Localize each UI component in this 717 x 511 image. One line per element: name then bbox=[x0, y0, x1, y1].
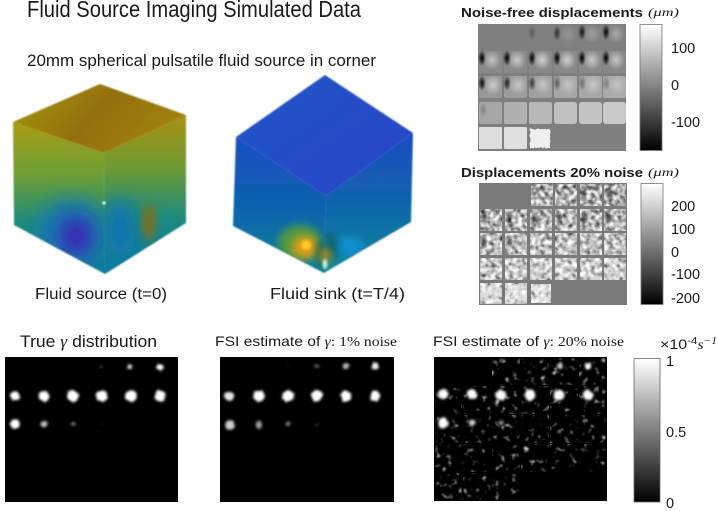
colorbar: noisy: 200 bbox=[671, 199, 695, 215]
panel: fluid sink cube bbox=[233, 75, 413, 273]
heading: true gamma distribution: True γ distribution bbox=[20, 332, 157, 351]
colorbar: gamma: 1 bbox=[666, 354, 674, 370]
chart: noisy displacement tiles bbox=[479, 183, 627, 305]
caption: fluid sink: Fluid sink (t=T/4) bbox=[270, 286, 405, 303]
heading: noise-free displacements: Noise-free displacements bbox=[461, 5, 643, 20]
colorbar: noisy: 0 bbox=[671, 245, 679, 261]
colorbar: noisy: -100 bbox=[671, 267, 700, 283]
colorbar: noise-free bbox=[640, 24, 700, 150]
image: estimate 1% noise bbox=[220, 357, 394, 502]
colorbar: noise-free: 100 bbox=[671, 41, 695, 57]
heading: displacements 20% noise: (μm) bbox=[648, 165, 679, 179]
image: true gamma bbox=[5, 357, 178, 502]
colorbar: gamma bbox=[634, 336, 717, 511]
colorbar: noisy: 100 bbox=[671, 222, 695, 238]
panel: fluid source cube bbox=[13, 84, 186, 274]
colorbar: gamma: s bbox=[697, 338, 704, 353]
colorbar: noise-free: -100 bbox=[671, 115, 700, 131]
colorbar: noisy: -200 bbox=[671, 291, 700, 307]
colorbar: gamma: 0.5 bbox=[666, 425, 686, 441]
heading: estimate 1% noise: FSI estimate of γ: 1% noise bbox=[215, 333, 397, 350]
colorbar: gamma: −1 bbox=[704, 336, 717, 347]
heading: estimate 20% noise: FSI estimate of γ: 20% noise bbox=[433, 333, 624, 350]
colorbar: noise-free: 0 bbox=[671, 78, 679, 94]
image: estimate 20% noise bbox=[434, 357, 607, 501]
colorbar: gamma: ×10 bbox=[660, 336, 684, 352]
colorbar: gamma: -4 bbox=[687, 336, 698, 347]
colorbar: noisy bbox=[641, 184, 700, 307]
subtitle: 20mm spherical pulsatile fluid source in corner bbox=[27, 52, 377, 70]
chart: noise-free displacement tiles bbox=[478, 24, 626, 151]
heading: noise-free displacements: (μm) bbox=[648, 5, 679, 19]
heading: displacements 20% noise: Displacements 20% noise bbox=[461, 165, 643, 180]
caption: fluid source: Fluid source (t=0) bbox=[35, 286, 167, 303]
